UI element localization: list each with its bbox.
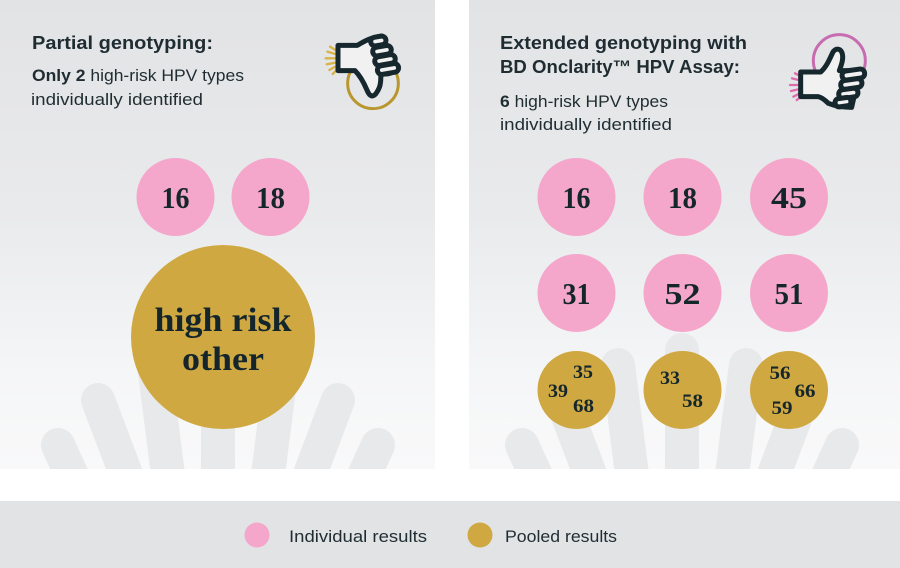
pooled circle: 35 39 68: 35 [573, 362, 593, 383]
icon: thumbs up [790, 35, 865, 107]
background hand rays [41, 373, 395, 469]
circle: 16: 16 [162, 180, 190, 215]
legend [0, 501, 900, 568]
pooled circle: 56 66 59: 56 [770, 363, 790, 384]
pooled circle: 56 66 59 [750, 351, 828, 429]
text: only 2 types: Only 2 high-risk HPV types [32, 67, 244, 85]
pooled circle: 35 39 68 [538, 351, 616, 429]
pooled circle: 33 58: 33 [660, 368, 680, 389]
legend: individual results [244, 522, 427, 548]
circle: 31: 31 [562, 276, 590, 311]
circle: high risk other [131, 245, 315, 429]
circle: 51: 51 [774, 276, 804, 311]
circle: 16 [136, 158, 214, 236]
circle: 18 [644, 158, 722, 236]
text: individually identified: individually identified [500, 116, 672, 134]
circle: 16: 16 [562, 180, 590, 215]
circle: 18: 18 [668, 180, 697, 215]
circle: 45 [750, 158, 828, 236]
circle: 51 [750, 254, 828, 332]
heading: extended genotyping [500, 33, 747, 77]
pooled circle: 56 66 59: 59 [772, 398, 792, 419]
legend: pooled results [468, 522, 617, 548]
circle: 18 [232, 158, 310, 236]
pooled circle: 35 39 68: 39 [548, 381, 568, 402]
panel: partial genotyping [0, 0, 435, 490]
circle: 16 [538, 158, 616, 236]
icon: thumbs down [326, 35, 399, 109]
circle: 52: 52 [664, 276, 700, 311]
circle: 45: 45 [771, 180, 807, 215]
legend: individual results: Individual results [289, 528, 427, 546]
text: 6 types: 6 high-risk HPV types [500, 93, 668, 111]
heading: partial genotyping: Partial genotyping: [32, 33, 213, 53]
background hand rays [522, 350, 842, 490]
text: individually identified: individually identified [31, 91, 203, 109]
pooled circle: 33 58: 58 [682, 391, 703, 412]
pooled circle: 35 39 68: 68 [573, 396, 594, 417]
circle: 31 [538, 254, 616, 332]
circle: 52 [644, 254, 722, 332]
legend: pooled results: Pooled results [505, 528, 617, 546]
pooled circle: 33 58 [644, 351, 722, 429]
pooled circle: 56 66 59: 66 [794, 381, 816, 402]
circle: high risk other: high risk [154, 302, 292, 339]
panel: extended genotyping [469, 0, 900, 490]
circle: 18: 18 [256, 180, 285, 215]
heading: extended genotyping: BD Onclarity™ HPV Assay: [500, 57, 740, 77]
heading: extended genotyping: Extended genotyping with [500, 33, 747, 53]
circle: high risk other: other [182, 341, 264, 378]
